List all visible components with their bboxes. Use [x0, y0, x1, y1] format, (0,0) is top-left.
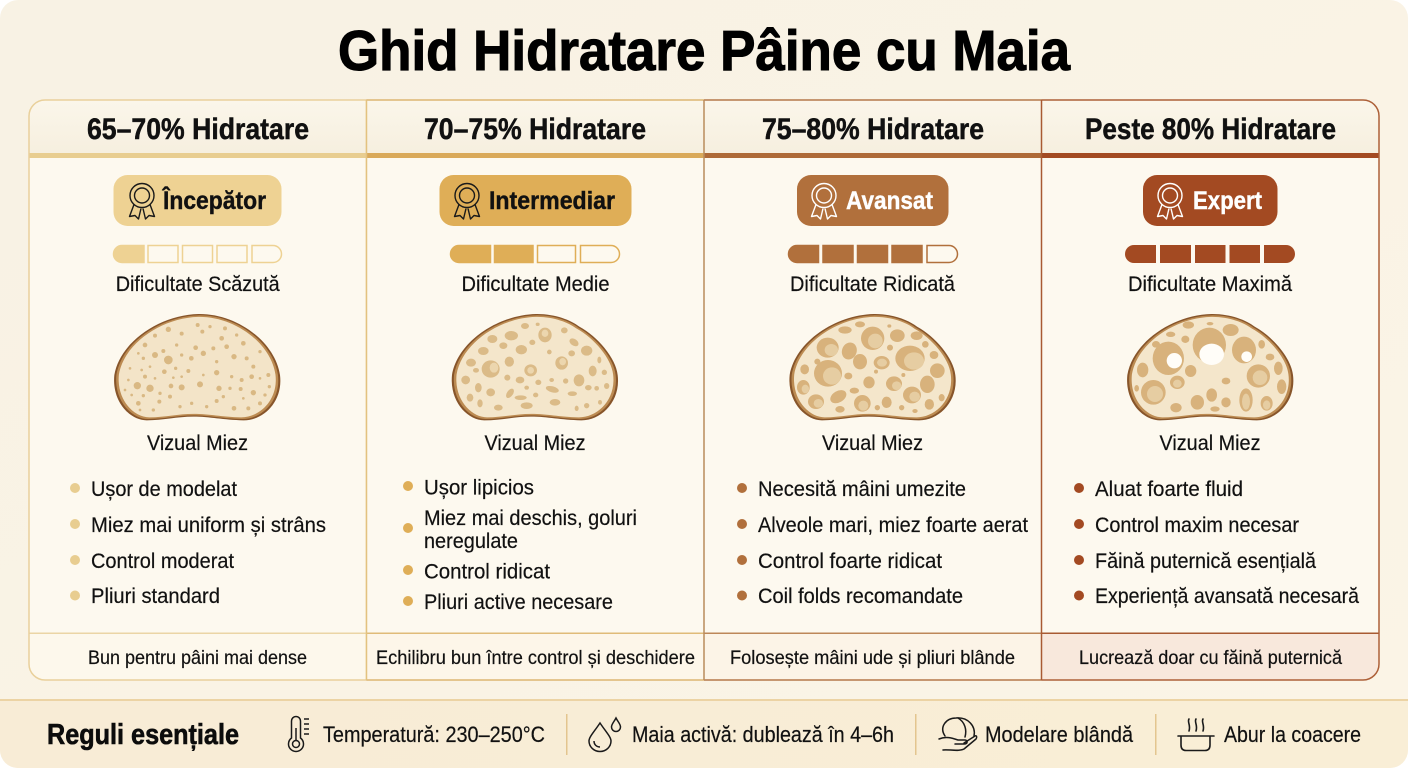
- icon: steaming pot: [1178, 719, 1214, 750]
- tip: Echilibru bun între control și deschidere: [376, 647, 695, 669]
- difficulty meter: [114, 246, 282, 262]
- tip: Folosește mâini ude și pliuri blânde: [730, 647, 1015, 669]
- icon: medal: [130, 184, 154, 219]
- bullet list: Alveole mari, miez foarte aerat: [758, 513, 1028, 537]
- bullet list: Aluat foarte fluid: [1095, 477, 1243, 501]
- panel: 65–70% Hidratare: [29, 100, 366, 680]
- bullet list: Făină puternică esențială: [1095, 549, 1316, 573]
- bullet list: neregulate: [424, 529, 518, 553]
- bullet list: Ușor lipicios: [424, 476, 534, 500]
- title: Ghid Hidratare Pâine cu Maia: [338, 19, 1071, 83]
- icon: medal: [454, 184, 480, 219]
- footer rules bar: [47, 714, 1361, 755]
- bullet list: Necesită mâini umezite: [758, 477, 966, 501]
- difficulty label: Dificultate Ridicată: [790, 273, 955, 296]
- level badge: [114, 175, 282, 226]
- rule: shaping: Modelare blândă: [985, 722, 1134, 747]
- level badge: [440, 175, 632, 226]
- heading: 65–70% Hidratare: [87, 113, 309, 146]
- bullet list: [737, 477, 1028, 608]
- bullet list: Miez mai uniform și strâns: [91, 513, 326, 537]
- bread crumb: dense: [114, 314, 280, 420]
- crumb caption: Vizual Miez: [484, 432, 586, 455]
- crumb caption: Vizual Miez: [147, 432, 248, 455]
- badge label: Expert: [1193, 187, 1263, 215]
- badge label: Intermediar: [489, 187, 615, 215]
- heading: 70–75% Hidratare: [424, 113, 646, 146]
- footer heading: Reguli esențiale: [47, 719, 239, 751]
- bullet list: Control foarte ridicat: [758, 549, 942, 573]
- bullet list: Pliuri standard: [91, 584, 220, 608]
- heading: Peste 80% Hidratare: [1085, 113, 1336, 146]
- level badge: [1143, 175, 1278, 226]
- panel: 75–80% Hidratare: [704, 100, 1042, 680]
- bread crumb: very large holes: [1127, 314, 1293, 420]
- rule: starter: Maia activă: dublează în 4–6h: [632, 722, 894, 747]
- difficulty meter: [788, 246, 958, 262]
- bullet list: Miez mai deschis, goluri: [424, 506, 637, 530]
- bullet list: Pliuri active necesare: [424, 590, 613, 614]
- level badge: [797, 175, 948, 226]
- bullet list: Coil folds recomandate: [758, 584, 963, 608]
- difficulty label: Dificultate Medie: [462, 273, 610, 296]
- bullet list: Control moderat: [91, 549, 234, 573]
- icon: medal: [1158, 184, 1182, 219]
- difficulty label: Dificultate Maximă: [1128, 273, 1292, 296]
- bullet list: [1074, 477, 1359, 608]
- bullet list: Experiență avansată necesară: [1095, 584, 1359, 608]
- crumb caption: Vizual Miez: [822, 432, 923, 455]
- icon: medal: [812, 184, 836, 219]
- badge label: Avansat: [846, 187, 934, 215]
- difficulty label: Dificultate Scăzută: [116, 273, 280, 296]
- tip: Bun pentru pâini mai dense: [88, 647, 307, 669]
- rule: steam: Abur la coacere: [1224, 722, 1361, 747]
- difficulty meter: [1125, 245, 1295, 263]
- tip: Lucrează doar cu făină puternică: [1079, 647, 1342, 669]
- difficulty meter: [450, 246, 620, 262]
- heading: 75–80% Hidratare: [762, 113, 984, 146]
- badge label: Începător: [161, 185, 266, 215]
- icon: thermometer: [288, 716, 309, 752]
- panel: 70–75% Hidratare: [366, 100, 704, 680]
- bullet list: Control maxim necesar: [1095, 513, 1299, 537]
- icon: hand shaping dough: [939, 718, 977, 750]
- bullet list: Ușor de modelat: [91, 477, 237, 501]
- bullet list: [403, 476, 637, 614]
- bullet list: Control ridicat: [424, 560, 550, 584]
- bread crumb: large holes: [789, 314, 956, 420]
- bullet list: [70, 477, 326, 608]
- crumb caption: Vizual Miez: [1160, 432, 1260, 455]
- icon: water drops: [589, 718, 620, 751]
- bread crumb: medium open: [452, 314, 618, 420]
- rule: temperature: Temperatură: 230–250°C: [323, 722, 545, 747]
- panel: Peste 80% Hidratare: [1042, 100, 1379, 680]
